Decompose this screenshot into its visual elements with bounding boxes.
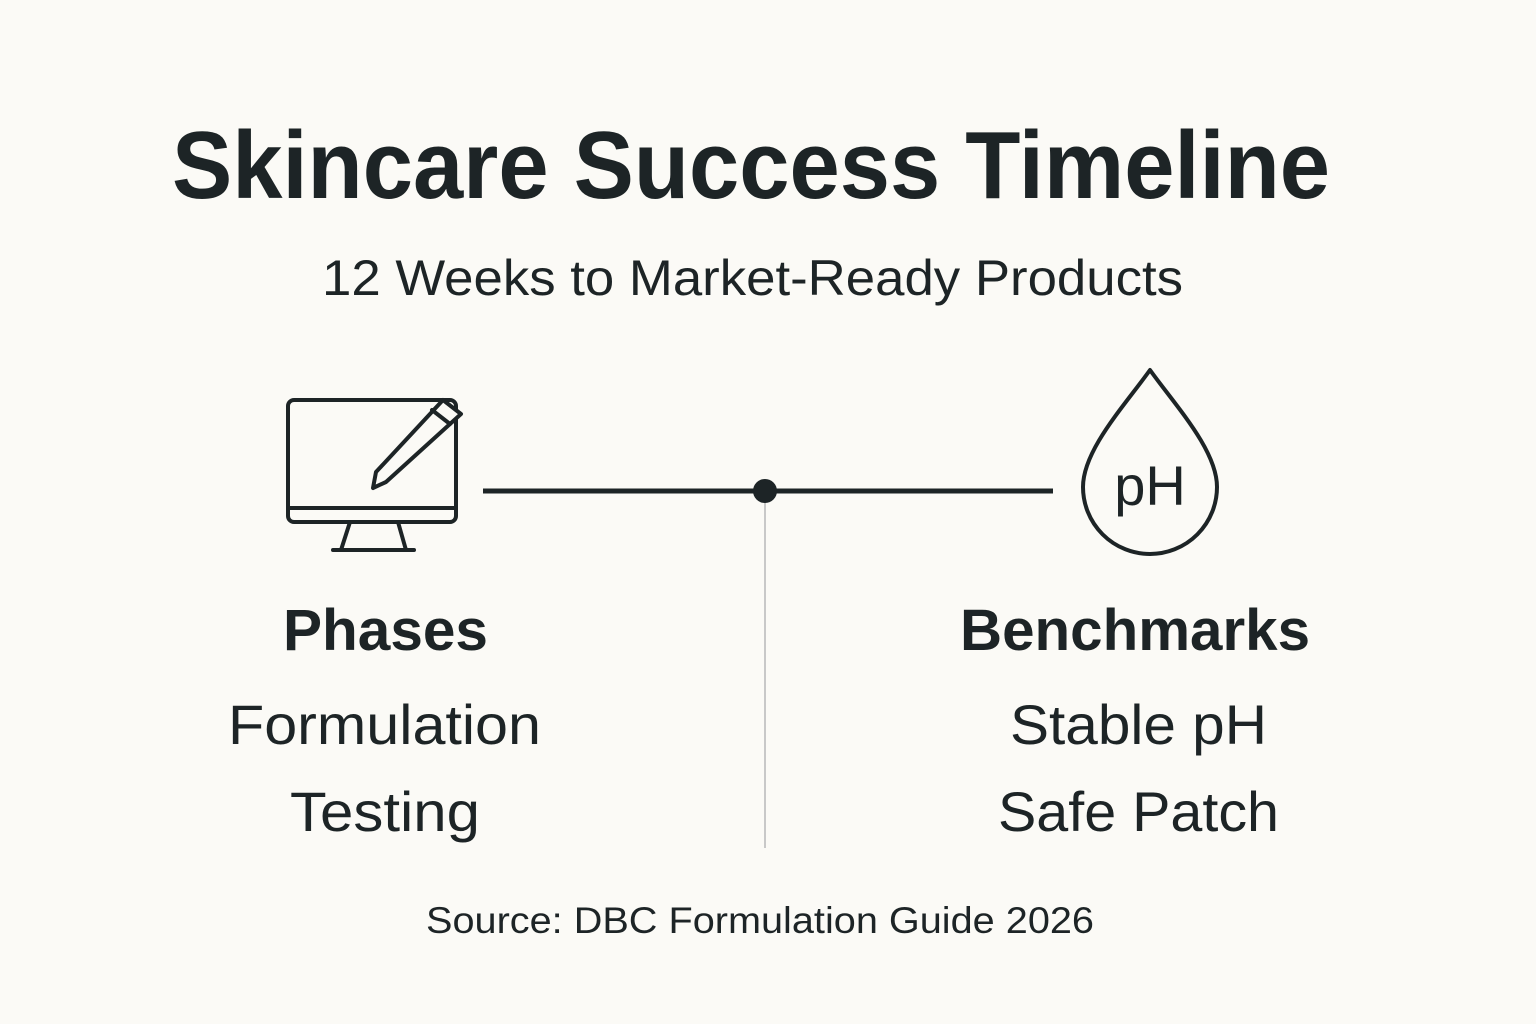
panel: phases: Testing bbox=[290, 780, 480, 843]
icon: pH drop: pH bbox=[1114, 454, 1186, 517]
panel: benchmarks: Benchmarks bbox=[960, 598, 1310, 663]
panel: benchmarks: Stable pH bbox=[1010, 693, 1267, 756]
icon: pH drop bbox=[1083, 370, 1217, 554]
panel: phases: Formulation bbox=[228, 693, 541, 756]
subtitle: 12 Weeks to Market-Ready Products bbox=[322, 250, 1183, 306]
source: Source: DBC Formulation Guide 2026 bbox=[426, 900, 1094, 941]
panel: benchmarks: Safe Patch bbox=[998, 780, 1279, 843]
timeline line bbox=[483, 479, 1053, 848]
panel: benchmarks bbox=[960, 598, 1310, 843]
panel: phases: Phases bbox=[283, 598, 488, 663]
icon: monitor with pencil bbox=[288, 400, 461, 550]
panel: phases bbox=[228, 598, 541, 843]
title: Skincare Success Timeline bbox=[172, 112, 1330, 219]
